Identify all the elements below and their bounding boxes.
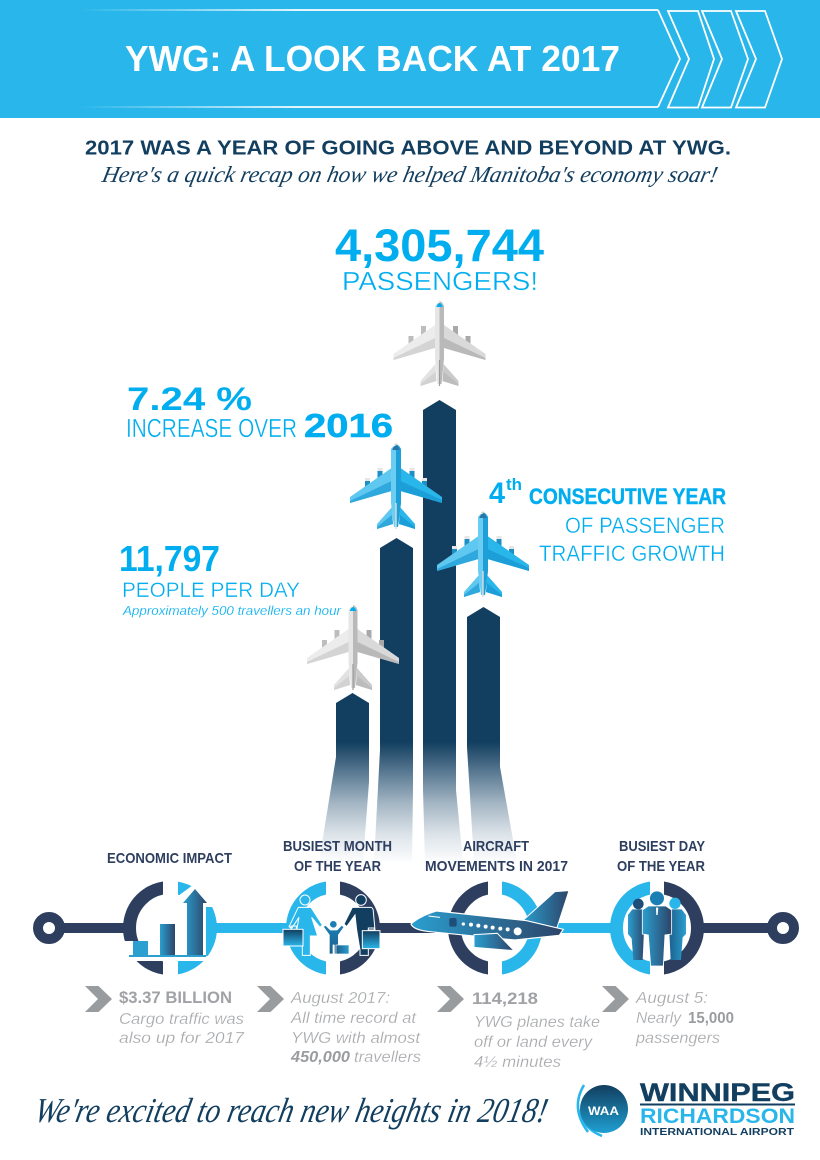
stat: consecutive year: TRAFFIC GROWTH <box>539 541 725 566</box>
stat: increase: 2016 <box>304 407 393 444</box>
stat: consecutive year <box>489 475 726 566</box>
plane: grey lower <box>307 605 399 690</box>
plane: grey top <box>394 301 486 386</box>
header banner <box>0 0 820 118</box>
logo: Winnipeg Richardson International Airport <box>578 1079 795 1138</box>
stat: increase: INCREASE OVER <box>126 413 297 443</box>
column heading: aircraft movements: MOVEMENTS IN 2017 <box>425 858 568 875</box>
text block: aircraft movements: 114,218 <box>472 989 538 1008</box>
rising columns <box>319 400 517 862</box>
column heading: economic impact: ECONOMIC IMPACT <box>107 850 232 867</box>
arrow: busiest day <box>602 986 629 1012</box>
text block: economic impact: Cargo traffic was <box>119 1011 244 1028</box>
column heading: busiest month <box>283 838 392 875</box>
column heading: busiest day: OF THE YEAR <box>617 858 705 875</box>
icon: three business people <box>616 888 698 968</box>
column heading: busiest month: BUSIEST MONTH <box>283 838 392 855</box>
script tagline: Here's a quick recap on how we helped Manitoba's economy soar! <box>99 162 720 188</box>
logo: Winnipeg Richardson International Airport: INTERNATIONAL AIRPORT <box>640 1127 794 1138</box>
stat: people per day: 11,797 <box>119 538 220 579</box>
plane: blue right <box>437 512 529 597</box>
column heading: busiest day: BUSIEST DAY <box>619 838 705 855</box>
logo: Winnipeg Richardson International Airport: WINNIPEG <box>640 1079 795 1107</box>
icon: family with suitcases <box>283 888 380 968</box>
text block: busiest day: Nearly <box>636 1010 682 1027</box>
text block: busiest month <box>257 986 421 1066</box>
text block: busiest day: August 5: <box>635 990 708 1007</box>
icon: economic impact chart <box>129 888 210 968</box>
column heading: aircraft movements: AIRCRAFT <box>463 838 529 855</box>
text block: busiest month: August 2017: <box>290 990 390 1007</box>
stat: passengers: PASSENGERS! <box>342 266 538 296</box>
header chevron outline <box>80 10 782 108</box>
icon: jet over ring <box>411 888 569 968</box>
text block: busiest day: 15,000 <box>688 1010 734 1027</box>
text block: busiest month: YWG with almost <box>291 1030 421 1047</box>
stat: increase: 7.24 % <box>127 381 252 417</box>
text block: aircraft movements <box>437 986 600 1071</box>
stat: increase <box>126 381 393 444</box>
logo mark: WAA <box>588 1104 619 1118</box>
text block: aircraft movements: YWG planes take <box>474 1014 600 1031</box>
text block: economic impact <box>85 986 245 1047</box>
plane: blue left <box>350 444 442 529</box>
timeline connector <box>38 917 794 939</box>
column heading: busiest month: OF THE YEAR <box>294 858 381 875</box>
arrow: aircraft movements <box>437 986 464 1012</box>
stat: people per day <box>119 538 342 618</box>
column heading: busiest day <box>617 838 705 875</box>
arrow: busiest month <box>257 986 284 1012</box>
subtitle: 2017 WAS A YEAR OF GOING ABOVE AND BEYOND AT YWG. <box>85 138 731 160</box>
text block: aircraft movements: 4½ minutes <box>474 1054 561 1071</box>
text block: aircraft movements: off or land every <box>474 1034 593 1051</box>
text block: busiest month: 450,000 <box>290 1049 350 1066</box>
stat: consecutive year: CONSECUTIVE YEAR <box>529 484 726 509</box>
column heading: aircraft movements <box>425 838 568 875</box>
stat: passengers: 4,305,744 <box>335 220 544 271</box>
stat: consecutive year: th <box>506 475 522 494</box>
text block: busiest month: travellers <box>354 1049 421 1066</box>
closing script line: We're excited to reach new heights in 2018! <box>31 1090 552 1130</box>
stat: consecutive year: 4 <box>489 477 505 510</box>
text block: economic impact: also up for 2017 <box>119 1030 245 1047</box>
logo mark <box>578 1085 628 1136</box>
text block: busiest day <box>602 986 734 1047</box>
stat: people per day: PEOPLE PER DAY <box>122 579 300 602</box>
text block: busiest month: All time record at <box>290 1010 417 1027</box>
arrow: economic impact <box>85 986 112 1012</box>
text block: busiest day: passengers <box>635 1030 720 1047</box>
title: YWG: A LOOK BACK AT 2017 <box>125 38 620 79</box>
stat: consecutive year: OF PASSENGER <box>565 513 725 538</box>
text block: economic impact: $3.37 BILLION <box>119 988 232 1007</box>
stat: passengers <box>335 220 544 296</box>
stat: people per day: Approximately 500 travellers an hour <box>122 604 342 618</box>
logo: Winnipeg Richardson International Airport: RICHARDSON <box>640 1105 795 1128</box>
